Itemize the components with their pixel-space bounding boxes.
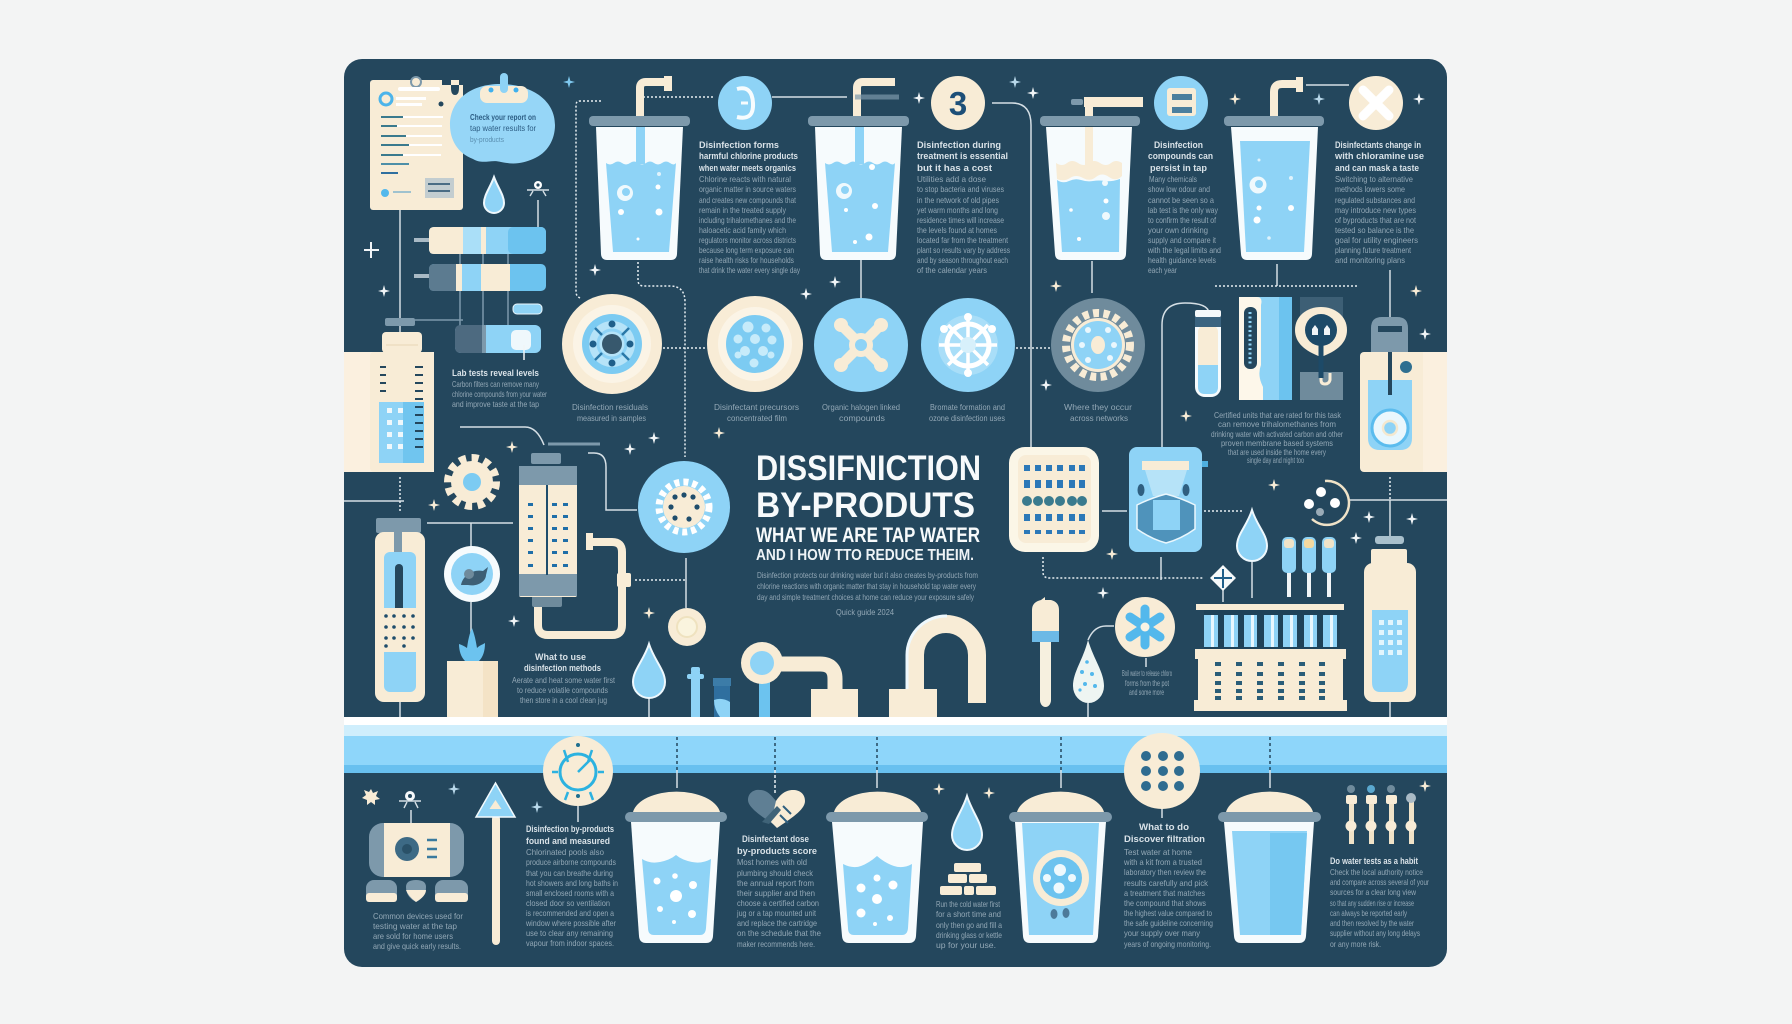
connector block	[385, 318, 463, 326]
text: lower column E: results carefully and pick	[1124, 878, 1209, 888]
text: lower column E: the compound that shows	[1124, 898, 1206, 908]
filter cartridge 2	[414, 264, 546, 291]
badge: number 3: 3	[949, 85, 967, 122]
text: column 1	[698, 140, 801, 275]
callout: blue bubble with text: Check your report on	[470, 112, 536, 122]
text: column 3: with the legal limits and	[1147, 245, 1221, 255]
text: lower drop note: Run the cold water first	[936, 899, 1000, 909]
text: lower column C: hot showers and long baths in	[526, 878, 618, 888]
text: column 3: lab test is the only way	[1148, 205, 1219, 215]
callout: blue bubble with text: by-products	[470, 137, 504, 144]
icon: plus marker	[364, 242, 379, 258]
text: lower drop note: only then go and fill a	[936, 920, 1002, 930]
left bottle	[344, 332, 434, 472]
text: lower drop note: for a short time and	[936, 909, 1001, 919]
cup 2 with straw	[808, 82, 909, 260]
text: lower column E: the safe guideline concerning	[1124, 918, 1213, 928]
title: BY-PRODUTS	[756, 486, 975, 525]
text: column 4: regulated substances and	[1335, 195, 1415, 205]
text: lower drop note: up for your use.	[936, 940, 996, 950]
text: left filter note: and improve taste at the tap	[452, 399, 539, 409]
text: column 3: compounds can	[1148, 151, 1213, 162]
text: lower column C: found and measured	[526, 836, 610, 847]
cup 4 with straw	[1224, 77, 1324, 260]
text: column 2: but it has a cost	[917, 163, 993, 174]
icon: small gear molecule	[399, 791, 421, 808]
blue device panel	[1239, 297, 1292, 400]
hanging connectors	[411, 737, 1270, 823]
text: column 1: organic matter in source waters	[699, 184, 796, 194]
icon: cream splat	[362, 789, 380, 805]
text: lower left note: testing water at the tap	[373, 921, 457, 931]
right bottle	[1360, 317, 1447, 472]
text: device note: proven membrane based systems	[1221, 438, 1333, 448]
text: lower column F: and compare across several of your	[1330, 877, 1429, 887]
text: column 1: remain in the treated supply	[699, 205, 787, 215]
text: column 4: planning future treatment	[1335, 245, 1412, 255]
text: lower column D: choose a certified carbon	[737, 898, 819, 908]
text: lower column C: Disinfection by-products	[526, 824, 614, 835]
water drop right	[1237, 510, 1267, 561]
panel: main dark background	[344, 59, 1447, 967]
text: lower column F: Do water tests as a habit	[1330, 856, 1419, 867]
text: lower column D: the annual report from	[737, 878, 814, 888]
sparkles	[378, 76, 1431, 813]
text: device note	[1211, 410, 1343, 465]
virus disc	[638, 461, 730, 553]
text: column 1: because long term exposure can	[699, 245, 794, 255]
text: lower column D: plumbing should check	[737, 868, 814, 878]
text: column 2: yet warm months and long	[917, 205, 998, 215]
icon: stacked bricks	[940, 863, 996, 895]
icon: four pins	[1346, 785, 1416, 844]
badge: X icon	[1349, 76, 1403, 130]
text: left filter note	[452, 368, 547, 409]
text: lower column E: your supply over many	[1124, 928, 1201, 938]
icon: warning sign post	[476, 783, 515, 945]
text: lower column E: years of ongoing monitoring.	[1124, 939, 1211, 949]
infographic: Boil water to release chloro	[1122, 668, 1172, 678]
text: column 2: Disinfection during	[917, 140, 1001, 151]
text: column 3: persist in tap	[1150, 163, 1207, 174]
text: drop caption	[1122, 668, 1172, 697]
treatment plant rack	[1194, 604, 1347, 711]
text: lower column E: with a kit from a trusted	[1123, 857, 1202, 867]
disc 2	[707, 296, 803, 392]
test tube	[1195, 310, 1221, 397]
text: filter caption: to reduce volatile compounds	[517, 685, 608, 695]
text: column 3	[1147, 140, 1221, 275]
title: AND I HOW TTO REDUCE THEIM.	[756, 547, 974, 564]
filter pill	[513, 304, 542, 314]
callout: blue bubble with text	[450, 73, 555, 163]
text: lower left note: and give quick early results.	[373, 941, 461, 951]
text: column 2: the levels found at homes	[917, 225, 997, 235]
text: left filter note: chlorine compounds from your water	[452, 389, 547, 399]
text: lower column F: so that any sudden rise or increase	[1330, 898, 1414, 908]
lower cup D	[1218, 792, 1321, 943]
water drop with stem	[633, 644, 665, 698]
text: column 3: each year	[1148, 265, 1177, 275]
speckled drop	[1073, 640, 1104, 703]
text: lower drop note: drinking glass or kettle	[936, 930, 1002, 940]
text: left filter note: Lab tests reveal levels	[452, 368, 539, 379]
text: column 4: with chloramine use	[1334, 151, 1424, 162]
text: column 4: Switching to alternative	[1335, 174, 1413, 184]
subtitle text: Quick guide 2024	[836, 607, 894, 617]
blue shield card	[1129, 447, 1208, 552]
text: lower column C: Chlorinated pools also	[526, 847, 604, 857]
disc captions: ozone disinfection uses	[929, 413, 1005, 423]
text: lower column D: maker recommends here.	[737, 939, 815, 949]
text: lower left note	[373, 911, 463, 951]
text: lower column C: vapour from indoor spaces.	[526, 938, 614, 948]
text: lower column C: closed door so ventilation	[526, 898, 610, 908]
text: column 4: Disinfectants change in	[1335, 140, 1421, 151]
text: lower column F: supplier without any long delays	[1330, 928, 1420, 938]
badge: molecules circle	[1124, 733, 1200, 809]
disc 1	[562, 294, 662, 394]
text: lower column E: laboratory then review the	[1124, 867, 1206, 877]
text: lower column C: use to clear any remaining	[526, 928, 613, 938]
text: drop caption: forms from the pot	[1125, 678, 1169, 688]
text: lower column F: Check the local authority notice	[1330, 867, 1423, 877]
text: column 1: raise health risks for households	[699, 255, 794, 265]
text: column 2: and by season throughout each	[917, 255, 1008, 265]
text: lower column E: the highest value compared to	[1124, 908, 1212, 918]
disc captions: concentrated film	[727, 413, 787, 423]
text: lower column F	[1330, 856, 1429, 949]
icon: split heart	[748, 790, 805, 828]
text: column 3: to confirm the result of	[1148, 215, 1217, 225]
disc captions	[572, 402, 1132, 423]
text: lower left note: are sold for home users	[373, 931, 453, 941]
disc 5 gear	[1051, 298, 1145, 392]
small ring	[668, 608, 706, 646]
icon: lower water drop	[952, 796, 982, 850]
cup 1 with straw	[589, 76, 690, 260]
text: lower column E: Discover filtration	[1124, 834, 1205, 845]
text: lower column D: jug or a tap mounted unit	[736, 908, 817, 918]
text: column 2: to stop bacteria and viruses	[917, 184, 1004, 194]
subtitle text: day and simple treatment choices at home can reduce your exposure safely	[757, 592, 975, 602]
text: column 1: haloacetic acid family which	[699, 225, 786, 235]
badge: equals icon	[1154, 76, 1208, 130]
text: column 2	[917, 140, 1010, 275]
text: lower column E: Test water at home	[1124, 847, 1192, 857]
text: lower drop note	[936, 899, 1002, 950]
text: lower column D: by-products score	[737, 846, 817, 857]
text: column 2: in the network of old pipes	[917, 195, 999, 205]
lower cup B	[826, 792, 928, 943]
text: lower column F: can always be reported early	[1330, 908, 1408, 918]
fish icon circle	[444, 546, 500, 602]
key ring icon	[1295, 297, 1347, 400]
title: WHAT WE ARE TAP WATER	[756, 524, 980, 547]
ring with dots	[1304, 481, 1349, 525]
text: lower column C: window where possible after	[525, 918, 616, 928]
text: lower column D: Disinfectant dose	[742, 834, 809, 845]
small vials	[687, 667, 731, 717]
text: lower column C: small enclosed rooms with a	[526, 888, 614, 898]
diamond icon	[1210, 565, 1236, 591]
text: lower column C: that you can breathe during	[526, 868, 613, 878]
disc captions: measured in samples	[577, 413, 646, 423]
text: column 3: Disinfection	[1154, 140, 1203, 151]
dropper	[1032, 597, 1059, 707]
text: lower column E: What to do	[1139, 822, 1189, 833]
callout: blue bubble with text: tap water results for	[470, 123, 536, 133]
lower cup A	[625, 792, 727, 943]
text: lower column D: on the schedule that the	[737, 928, 821, 938]
text: column 4: goal for utility engineers	[1335, 235, 1418, 245]
icon: small molecule	[527, 181, 549, 196]
text: column 1: when water meets organics	[698, 163, 796, 174]
disc captions: Organic halogen linked	[822, 402, 900, 412]
disc captions: Disinfectant precursors	[714, 402, 799, 412]
text: lower column C: produce airborne compounds	[526, 857, 616, 867]
text: filter caption: disinfection methods	[524, 663, 601, 674]
text: column 4: may introduce new types	[1335, 205, 1416, 215]
title	[756, 449, 981, 564]
right lower bottle	[1364, 536, 1416, 702]
asterisk circle	[1115, 597, 1175, 657]
disc 3	[814, 298, 908, 392]
disc captions: compounds	[839, 413, 885, 423]
text: lower column F: sources for a clear long view	[1330, 887, 1417, 897]
text: device note: drinking water with activated carbon and other	[1211, 429, 1343, 439]
faucet 2 arch	[889, 616, 977, 717]
badge: number 3	[931, 76, 985, 130]
text: filter caption: What to use	[535, 652, 586, 663]
text: device note: single day and night too	[1247, 455, 1304, 465]
text: filter caption	[512, 652, 616, 705]
text: column 4: tested so balance is the	[1335, 225, 1414, 235]
icon: clipboard document	[370, 77, 463, 210]
text: column 1: harmful chlorine products	[699, 151, 798, 162]
disc captions: Disinfection residuals	[572, 402, 648, 412]
text: lower column D: Most homes with old	[737, 857, 807, 867]
disc captions: Where they occur	[1064, 402, 1132, 412]
text: column 3: show low odour and	[1148, 184, 1210, 194]
text: device note: that are used inside the home every	[1228, 447, 1327, 457]
text: column 2: plant so results vary by address	[917, 245, 1010, 255]
text: lower column F: and then resolved by the water	[1330, 918, 1414, 928]
text: column 2: of the calendar years	[917, 265, 987, 275]
text: filter caption: then store in a cool clean jug	[520, 695, 607, 705]
text: column 1: including trihalomethanes and the	[699, 215, 796, 225]
text: column 1: Disinfection forms	[699, 140, 779, 151]
text: left filter note: Carbon filters can remove many	[452, 379, 540, 389]
text: filter caption: Aerate and heat some water first	[512, 675, 616, 685]
cup 3 with foam	[1040, 97, 1143, 260]
subtitle text: chlorine reactions with organic matter that stay in household tap water every	[757, 581, 977, 591]
text: column 1: and creates new compounds that	[699, 195, 796, 205]
connector lines	[344, 85, 1447, 717]
faucet 1	[741, 642, 858, 717]
text: lower column F: or any more risk.	[1330, 939, 1381, 949]
icon: water drop top left	[484, 177, 504, 213]
gear icon	[448, 458, 496, 506]
text: lower column E: a treatment that matches	[1124, 888, 1205, 898]
text: column 1: that drink the water every single day	[699, 265, 801, 275]
three sample tubes	[1282, 537, 1336, 597]
badge: bacteria circle	[543, 736, 613, 806]
filter cartridge 3	[455, 325, 541, 360]
icon: lower left gadget	[366, 823, 468, 902]
text: drop caption: and some more	[1129, 687, 1164, 697]
title: DISSIFNICTION	[756, 449, 981, 488]
text: lower column D: their supplier and then	[737, 888, 815, 898]
text: column 3: cannot be seen so a	[1148, 195, 1214, 205]
filter cartridge 1	[414, 227, 546, 254]
text: column 2: treatment is essential	[917, 151, 1008, 162]
subtitle text	[757, 570, 978, 617]
text: lower column E	[1123, 822, 1213, 949]
text: column 1: regulators monitor across districts	[699, 235, 796, 245]
disc captions: Bromate formation and	[930, 402, 1005, 412]
text: column 4	[1334, 140, 1424, 265]
text: lower left note: Common devices used for	[373, 911, 463, 921]
text: device note: Certified units that are rated for this task	[1214, 410, 1342, 420]
text: lower column C	[525, 824, 618, 948]
pipe band	[344, 717, 1447, 773]
left tube	[375, 518, 425, 702]
text: column 3: health guidance levels	[1148, 255, 1216, 265]
text: lower column D: and replace the cartridge	[737, 918, 817, 928]
text: column 2: Utilities add a dose	[917, 174, 986, 184]
text: column 4: and can mask a taste	[1335, 163, 1419, 174]
text: lower column D	[736, 834, 821, 949]
text: device note: can remove trihalomethanes from	[1218, 419, 1336, 429]
text: column 1: Chlorine reacts with natural	[699, 174, 791, 184]
filter column with pipe	[519, 453, 631, 635]
badge: blue circle 1	[718, 76, 772, 130]
text: lower column C: is recommended and open a	[526, 908, 614, 918]
text: column 4: and monitoring plans	[1335, 255, 1405, 265]
flame plant and block	[447, 628, 498, 717]
disc 4 ship wheel	[921, 298, 1015, 392]
text: column 3: Many chemicals	[1149, 174, 1197, 184]
grid card	[1009, 447, 1099, 552]
text: column 2: located far from the treatment	[917, 235, 1009, 245]
subtitle text: Disinfection protects our drinking water but it also creates by-products from	[757, 570, 978, 580]
text: column 2: residence times will increase	[917, 215, 1004, 225]
lower cup C	[1009, 792, 1112, 943]
text: column 3: your own drinking	[1148, 225, 1208, 235]
text: column 4: of byproducts that are not	[1335, 215, 1417, 225]
disc captions: across networks	[1070, 413, 1128, 423]
text: column 3: supply and compare it	[1148, 235, 1217, 245]
text: column 4: methods lowers some	[1335, 184, 1405, 194]
